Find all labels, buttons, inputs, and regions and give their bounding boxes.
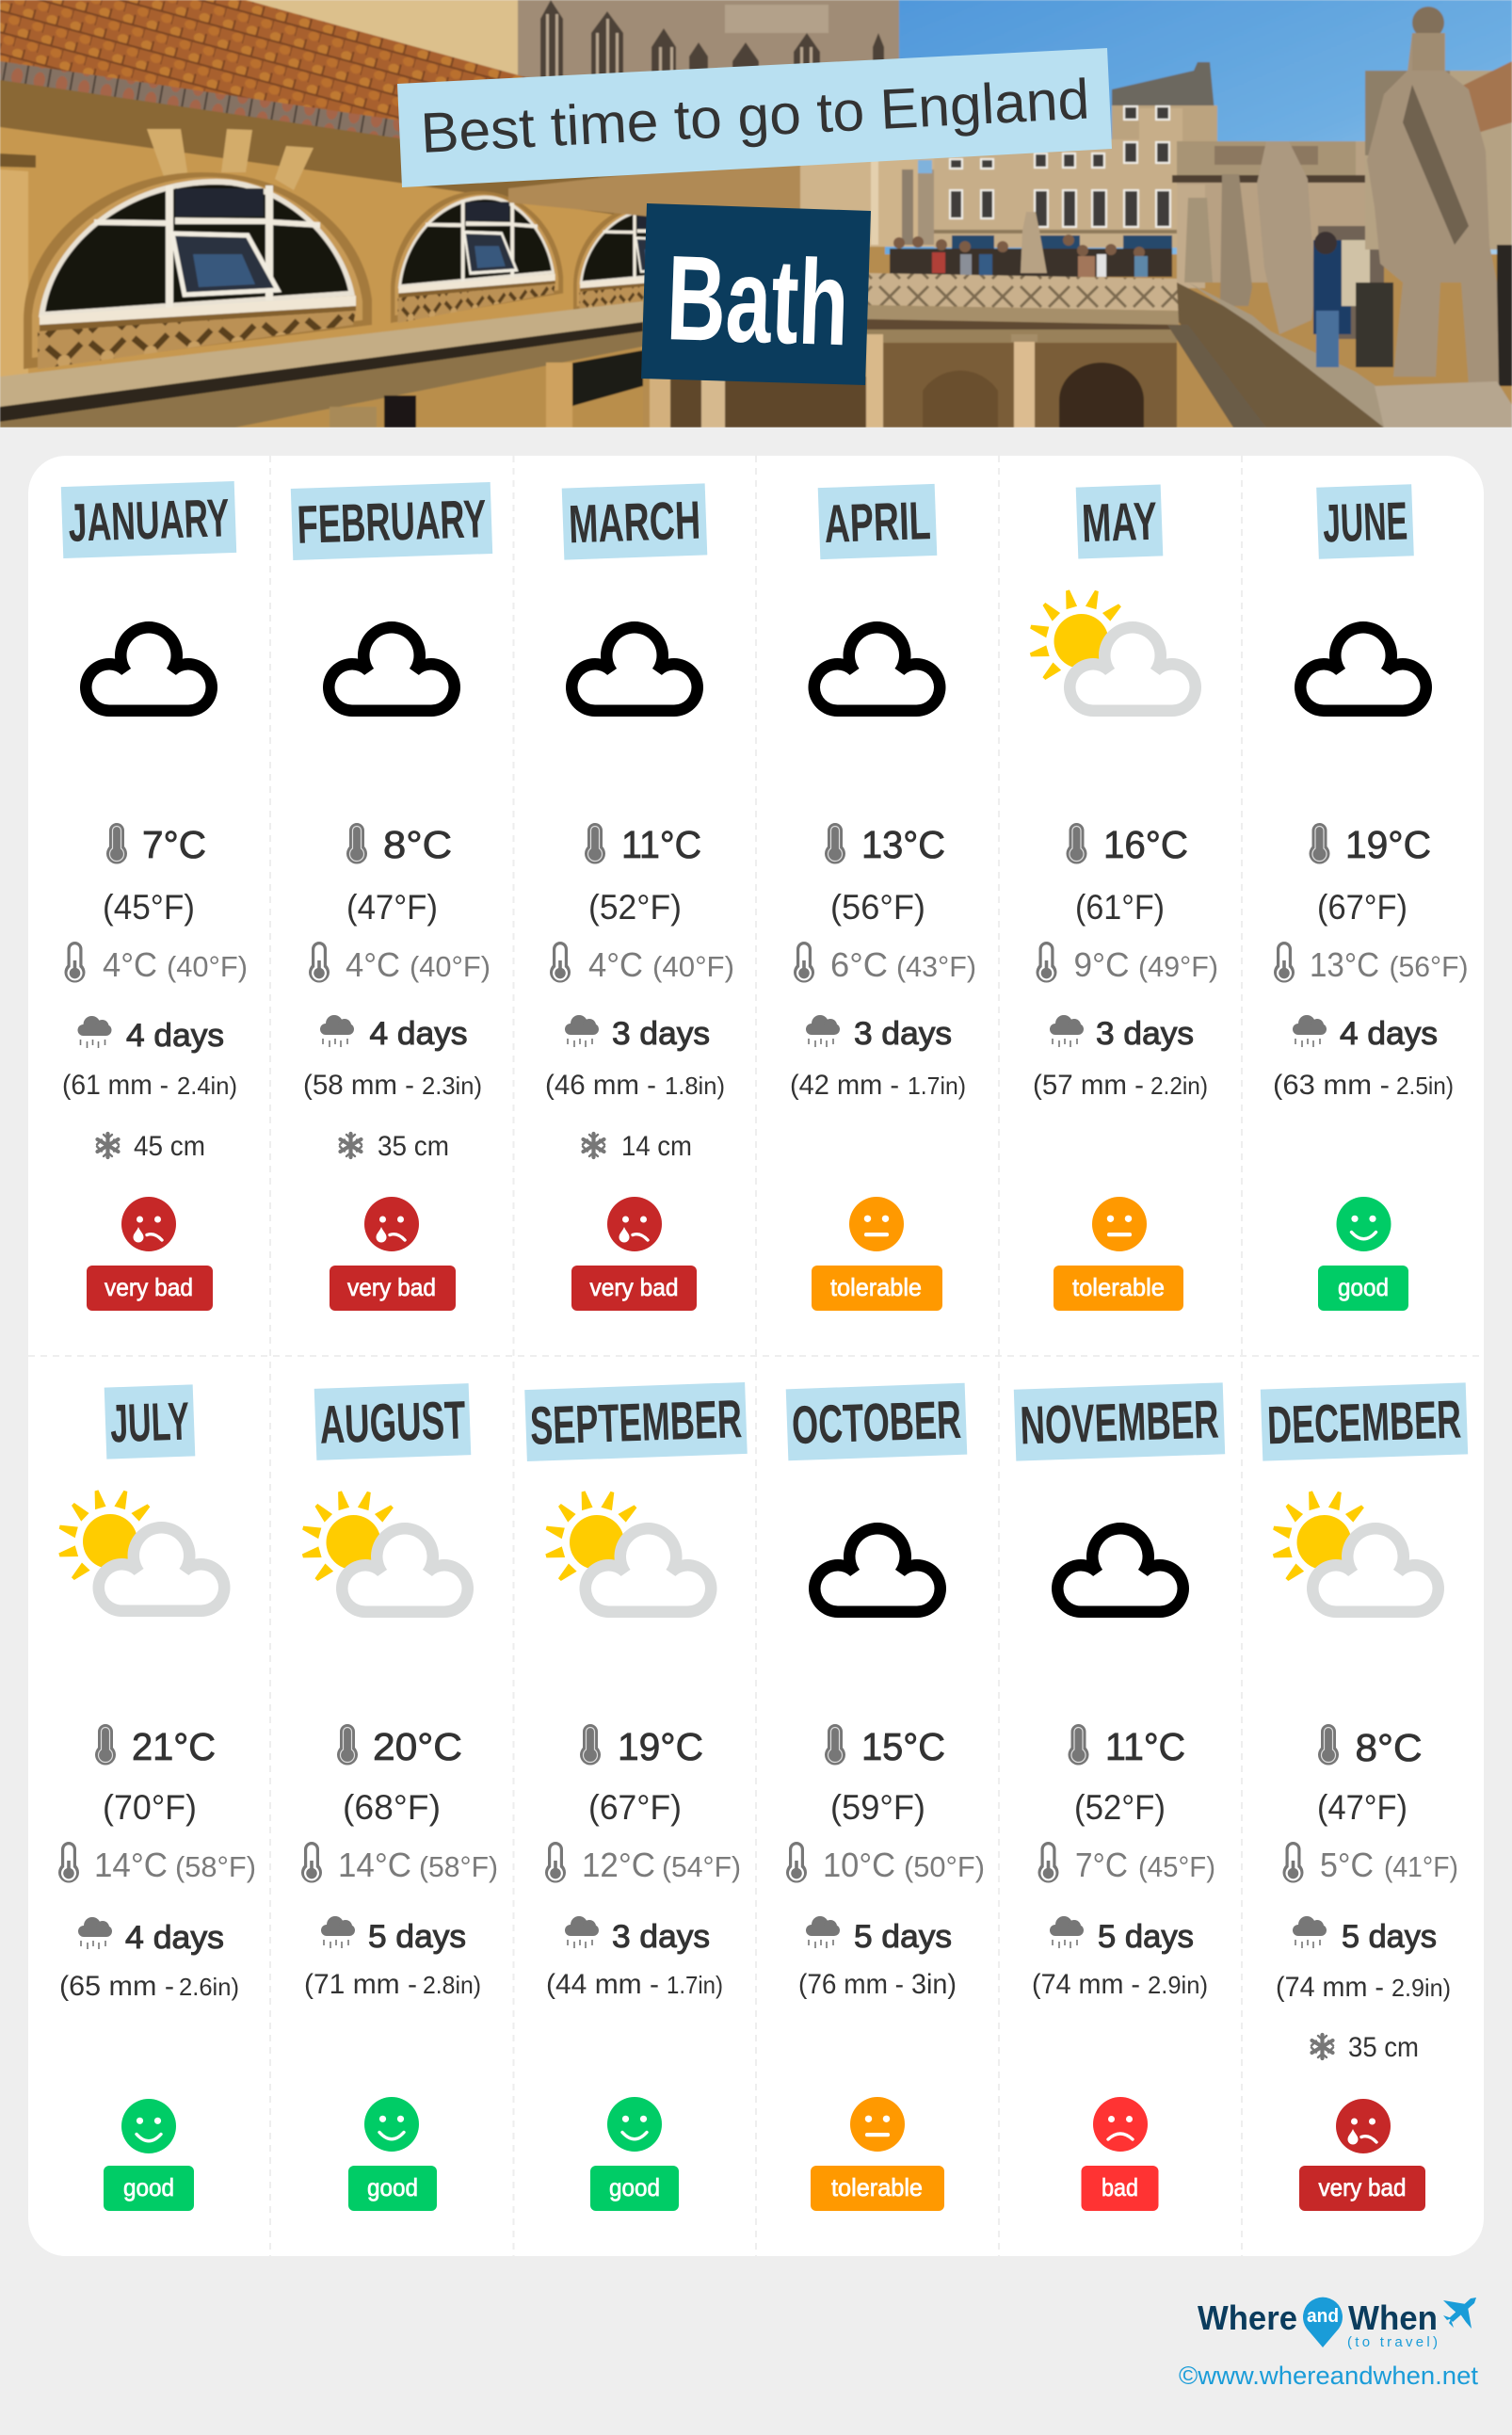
low temperature: 4°C [103,945,157,984]
rainfall: 2.9in) [1148,1971,1208,1999]
rainfall [1032,1969,1208,2000]
rating [330,1197,456,1311]
rainy days: 5 days [1098,1919,1194,1955]
low temperature [1282,1842,1458,1884]
rainfall [1273,1070,1454,1101]
average high temperature [95,1724,216,1768]
fahrenheit high: (61°F) [1075,888,1165,927]
icon: cloudy [1295,621,1432,717]
main panel [28,456,1484,2256]
rainfall: (71 mm - [304,1969,417,2000]
average high temperature [1309,823,1431,866]
average high temperature: 11°C [1105,1725,1185,1768]
month heading: OCTOBER [791,1390,962,1456]
snowfall [340,1131,449,1162]
rainfall: (58 mm - [303,1070,414,1101]
icon: partly cloudy [1029,589,1201,717]
low temperature: (45°F) [1138,1850,1215,1883]
average high temperature [585,823,701,866]
fahrenheit high: (68°F) [343,1788,441,1827]
low temperature: (40°F) [410,950,491,983]
rainfall [1033,1070,1208,1101]
rainy days: 3 days [612,1919,710,1955]
icon: partly cloudy [57,1490,230,1617]
rating [571,1197,697,1311]
title banner: Best time to go to England [419,67,1091,165]
month heading: FEBRUARY [297,489,488,556]
low temperature: (40°F) [652,950,734,983]
icon: cloudy [80,621,217,717]
rainy days [1050,1015,1194,1052]
rating: bad [1102,2173,1138,2201]
fahrenheit high: (67°F) [588,1788,682,1827]
rating [87,1197,213,1311]
city name banner: Bath [665,231,851,371]
rainy days [565,1015,710,1052]
month heading [291,482,492,560]
low temperature [550,942,734,984]
rating: tolerable [831,2173,923,2201]
low temperature: (58°F) [175,1850,256,1883]
rainy days [78,1917,224,1956]
icon: cloudy [323,621,460,717]
rating: good [123,2173,174,2201]
rating: tolerable [1072,1273,1165,1301]
rainy days: 5 days [368,1919,466,1955]
rainy days: 4 days [125,1920,224,1956]
rating: very bad [105,1273,193,1301]
icon: cloudy [1052,1523,1189,1618]
rating: very bad [347,1273,436,1301]
rainfall: (57 mm - [1033,1070,1144,1101]
average high temperature [337,1724,462,1768]
month heading: JULY [109,1392,190,1454]
rainfall: 3in) [911,1969,957,2000]
icon: partly cloudy [301,1491,474,1618]
rainfall: 1.8in) [665,1072,725,1100]
snowfall: 45 cm [134,1131,205,1162]
low temperature [786,1842,985,1884]
fahrenheit high: (52°F) [1074,1788,1166,1827]
rating [590,2097,679,2211]
panel: October [786,1383,985,2211]
snowfall [1311,2032,1419,2063]
rainfall: 2.8in) [423,1971,481,1999]
average high temperature: 21°C [132,1725,216,1768]
month heading [818,484,937,559]
panel: July [57,1384,256,2211]
snowfall: 14 cm [621,1131,692,1162]
rainfall: 2.2in) [1150,1072,1208,1100]
rating [348,2097,437,2211]
month heading: AUGUST [318,1390,467,1456]
average high temperature [825,823,945,866]
rainfall [304,1969,481,2000]
rainfall: (61 mm - [62,1070,169,1101]
icon: cloudy [808,621,945,717]
panel: August [301,1383,498,2211]
month heading [562,483,707,560]
rainy days [565,1916,710,1955]
low temperature: (49°F) [1138,950,1218,983]
average high temperature: 16°C [1103,823,1188,866]
low temperature: (58°F) [419,1850,498,1883]
rating: very bad [1318,2173,1407,2201]
fahrenheit high: (56°F) [830,888,925,927]
low temperature: 7°C [1075,1846,1128,1884]
rainy days: 3 days [612,1016,710,1052]
average high temperature [1318,1724,1422,1769]
low temperature: 14°C [338,1846,411,1884]
icon: partly cloudy [544,1491,717,1618]
low temperature [309,942,491,984]
average high temperature: 15°C [861,1725,945,1768]
rainy days: 3 days [854,1016,952,1052]
low temperature: 14°C [94,1846,168,1884]
rainfall: 1.7in) [908,1072,966,1100]
rainy days [77,1016,224,1054]
low temperature [1274,942,1469,984]
rainfall: 2.3in) [422,1072,482,1100]
panel: May [1029,484,1218,1311]
average high temperature [580,1724,703,1768]
low temperature [794,942,976,984]
rainy days [806,1015,952,1052]
low temperature: (40°F) [167,950,248,983]
low temperature: 6°C [830,945,888,984]
rainfall [303,1070,482,1101]
rating: tolerable [830,1273,922,1301]
low temperature: (50°F) [904,1850,985,1883]
low temperature [58,1842,256,1884]
rainfall [62,1070,237,1101]
panel: April [790,484,976,1311]
icon: airplane [1443,2298,1476,2329]
fahrenheit high: (47°F) [346,888,438,927]
rainfall: (74 mm - [1276,1972,1384,2003]
low temperature: 12°C [582,1846,655,1884]
month heading [1316,484,1414,559]
rainfall [790,1070,966,1101]
fahrenheit high: (45°F) [103,888,195,927]
icon: partly cloudy [1272,1491,1444,1618]
panel: March [545,483,734,1311]
rainy days: 3 days [1096,1016,1194,1052]
rainy days: 4 days [1340,1016,1438,1052]
low temperature: 9°C [1073,945,1130,984]
rating [812,1197,942,1311]
rainfall [1276,1972,1451,2003]
rating: good [367,2173,418,2201]
average high temperature: 19°C [1345,823,1431,866]
average high temperature: 19°C [618,1725,703,1768]
rainfall: (74 mm - [1032,1969,1140,2000]
month heading: NOVEMBER [1020,1390,1220,1456]
rating [1318,1197,1408,1311]
rating: very bad [589,1273,678,1301]
rainfall: (46 mm - [545,1070,656,1101]
rainfall: (76 mm - [798,1969,904,2000]
rainfall: (65 mm - [59,1971,174,2002]
panel: September [524,1382,748,2211]
snowfall [583,1131,692,1162]
low temperature [1037,1842,1215,1884]
logo: Where and When (to travel): and [1307,2306,1339,2327]
rating [1054,1197,1183,1311]
panel: February [291,482,492,1311]
rating: good [1338,1273,1389,1301]
hero photo: Roman Baths, Bath [0,0,1512,427]
fahrenheit high: (70°F) [103,1788,197,1827]
fahrenheit high: (67°F) [1317,888,1407,927]
title banner [397,48,1112,187]
rainy days: 4 days [369,1016,467,1052]
low temperature [1036,942,1218,984]
rainfall: 1.7in) [667,1971,723,1999]
average high temperature [825,1724,945,1768]
average high temperature: 8°C [1356,1726,1422,1769]
rainy days [1293,1015,1438,1052]
rainfall: (63 mm - [1273,1070,1390,1101]
rainfall: (42 mm - [790,1070,899,1101]
month heading [1014,1382,1225,1461]
logo: Where and When (to travel) [1198,2298,1476,2350]
rainfall: 2.9in) [1391,1974,1451,2002]
fahrenheit high: (59°F) [830,1788,925,1827]
month heading [61,481,236,558]
rainfall: 2.4in) [177,1072,237,1100]
rainy days [1050,1916,1194,1955]
low temperature: 10°C [823,1846,895,1884]
average high temperature: 11°C [621,823,701,866]
month heading [524,1382,748,1461]
rating [1299,2099,1425,2211]
average high temperature: 8°C [383,823,452,866]
logo: Where and When (to travel): (to travel) [1347,2334,1438,2350]
panel: December [1261,1382,1468,2211]
month heading: JUNE [1322,491,1408,555]
low temperature: (56°F) [1390,950,1469,983]
rainy days [321,1916,466,1955]
low temperature [545,1842,741,1884]
month heading: JANUARY [68,488,231,554]
month heading: APRIL [823,491,932,555]
icon: cloudy [566,621,703,717]
month heading: MARCH [568,491,701,555]
low temperature: 13°C [1310,945,1379,984]
panel: June [1273,484,1469,1311]
panel: November [1014,1382,1225,2211]
rainy days [806,1916,952,1955]
rainy days [1293,1916,1437,1955]
rainy days: 5 days [854,1919,952,1955]
logo: Where and When (to travel): Where [1198,2298,1297,2337]
rainfall [546,1969,723,2000]
rainfall: 2.6in) [179,1973,239,2001]
city name banner [641,203,871,385]
rainfall [59,1971,239,2002]
month heading [786,1383,967,1460]
average high temperature [346,823,452,866]
rainfall: 2.5in) [1396,1072,1454,1100]
rainfall: (44 mm - [546,1969,659,2000]
rating [104,2099,194,2211]
low temperature: (43°F) [896,950,976,983]
snowfall: 35 cm [378,1131,449,1162]
snowfall [97,1131,205,1162]
rainfall [545,1070,725,1101]
icon: map pin [1303,2298,1343,2347]
rainy days: 5 days [1342,1919,1437,1955]
low temperature: 5°C [1320,1846,1374,1884]
low temperature: (41°F) [1384,1850,1458,1883]
icon: cloudy [809,1523,946,1618]
low temperature [301,1842,498,1884]
rainy days [320,1015,467,1052]
website credit: ©www.whereandwhen.net [1179,2362,1478,2390]
average high temperature [1066,823,1188,866]
rating [811,2097,944,2211]
average high temperature: 20°C [373,1725,462,1768]
fahrenheit high: (52°F) [588,888,682,927]
low temperature: 4°C [346,945,400,984]
month heading: MAY [1081,492,1158,554]
average high temperature [106,823,206,866]
month heading [105,1384,195,1459]
logo: Where and When (to travel): When [1348,2298,1438,2337]
low temperature: 4°C [588,945,643,984]
rainy days: 4 days [126,1018,224,1054]
month heading [1076,484,1163,559]
rating: good [609,2173,660,2201]
low temperature [64,942,248,984]
rating [1081,2097,1158,2211]
fahrenheit high: (47°F) [1317,1788,1407,1827]
low temperature: (54°F) [662,1850,741,1883]
average high temperature: 13°C [861,823,945,866]
panel: January [61,481,248,1311]
month heading [314,1383,471,1460]
month heading: SEPTEMBER [529,1389,743,1457]
snowfall: 35 cm [1348,2032,1419,2063]
average high temperature [1068,1724,1185,1768]
average high temperature: 7°C [142,823,206,866]
